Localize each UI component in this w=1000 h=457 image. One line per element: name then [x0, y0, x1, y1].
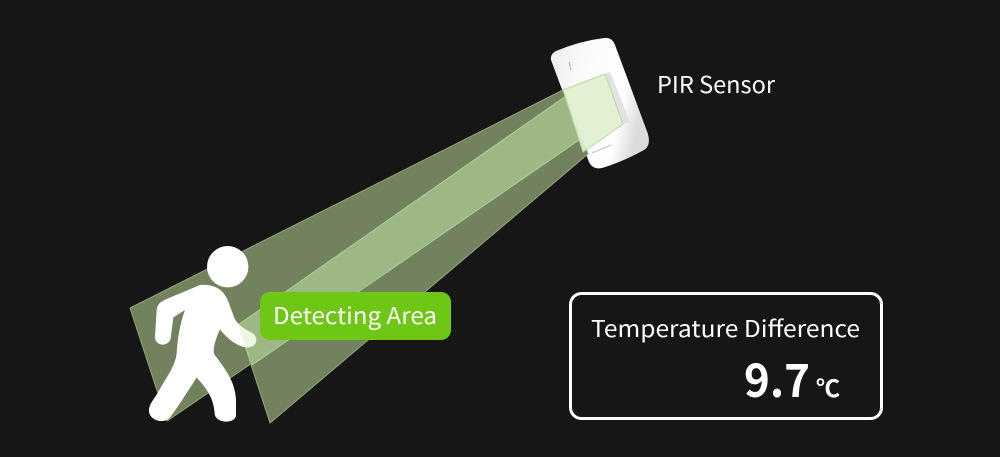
hand tint from beam [238, 324, 256, 348]
unit: degrees Celsius: ℃ [816, 369, 840, 404]
label: Detecting Area: Detecting Area [273, 297, 437, 331]
heading: temperature difference: Temperature Difference [591, 310, 860, 344]
detection beam: wide [130, 90, 582, 421]
label: Detecting Area [260, 292, 451, 340]
value: 9.7: 9.7 [744, 345, 810, 411]
beam overlap band [238, 96, 582, 365]
sensor lens window [563, 74, 623, 152]
PIR sensor device [551, 38, 649, 168]
label: PIR Sensor: PIR Sensor [657, 66, 775, 100]
panel: temperature difference [570, 294, 882, 418]
detection beam: narrow [238, 96, 588, 423]
icon: walking person [149, 246, 256, 422]
